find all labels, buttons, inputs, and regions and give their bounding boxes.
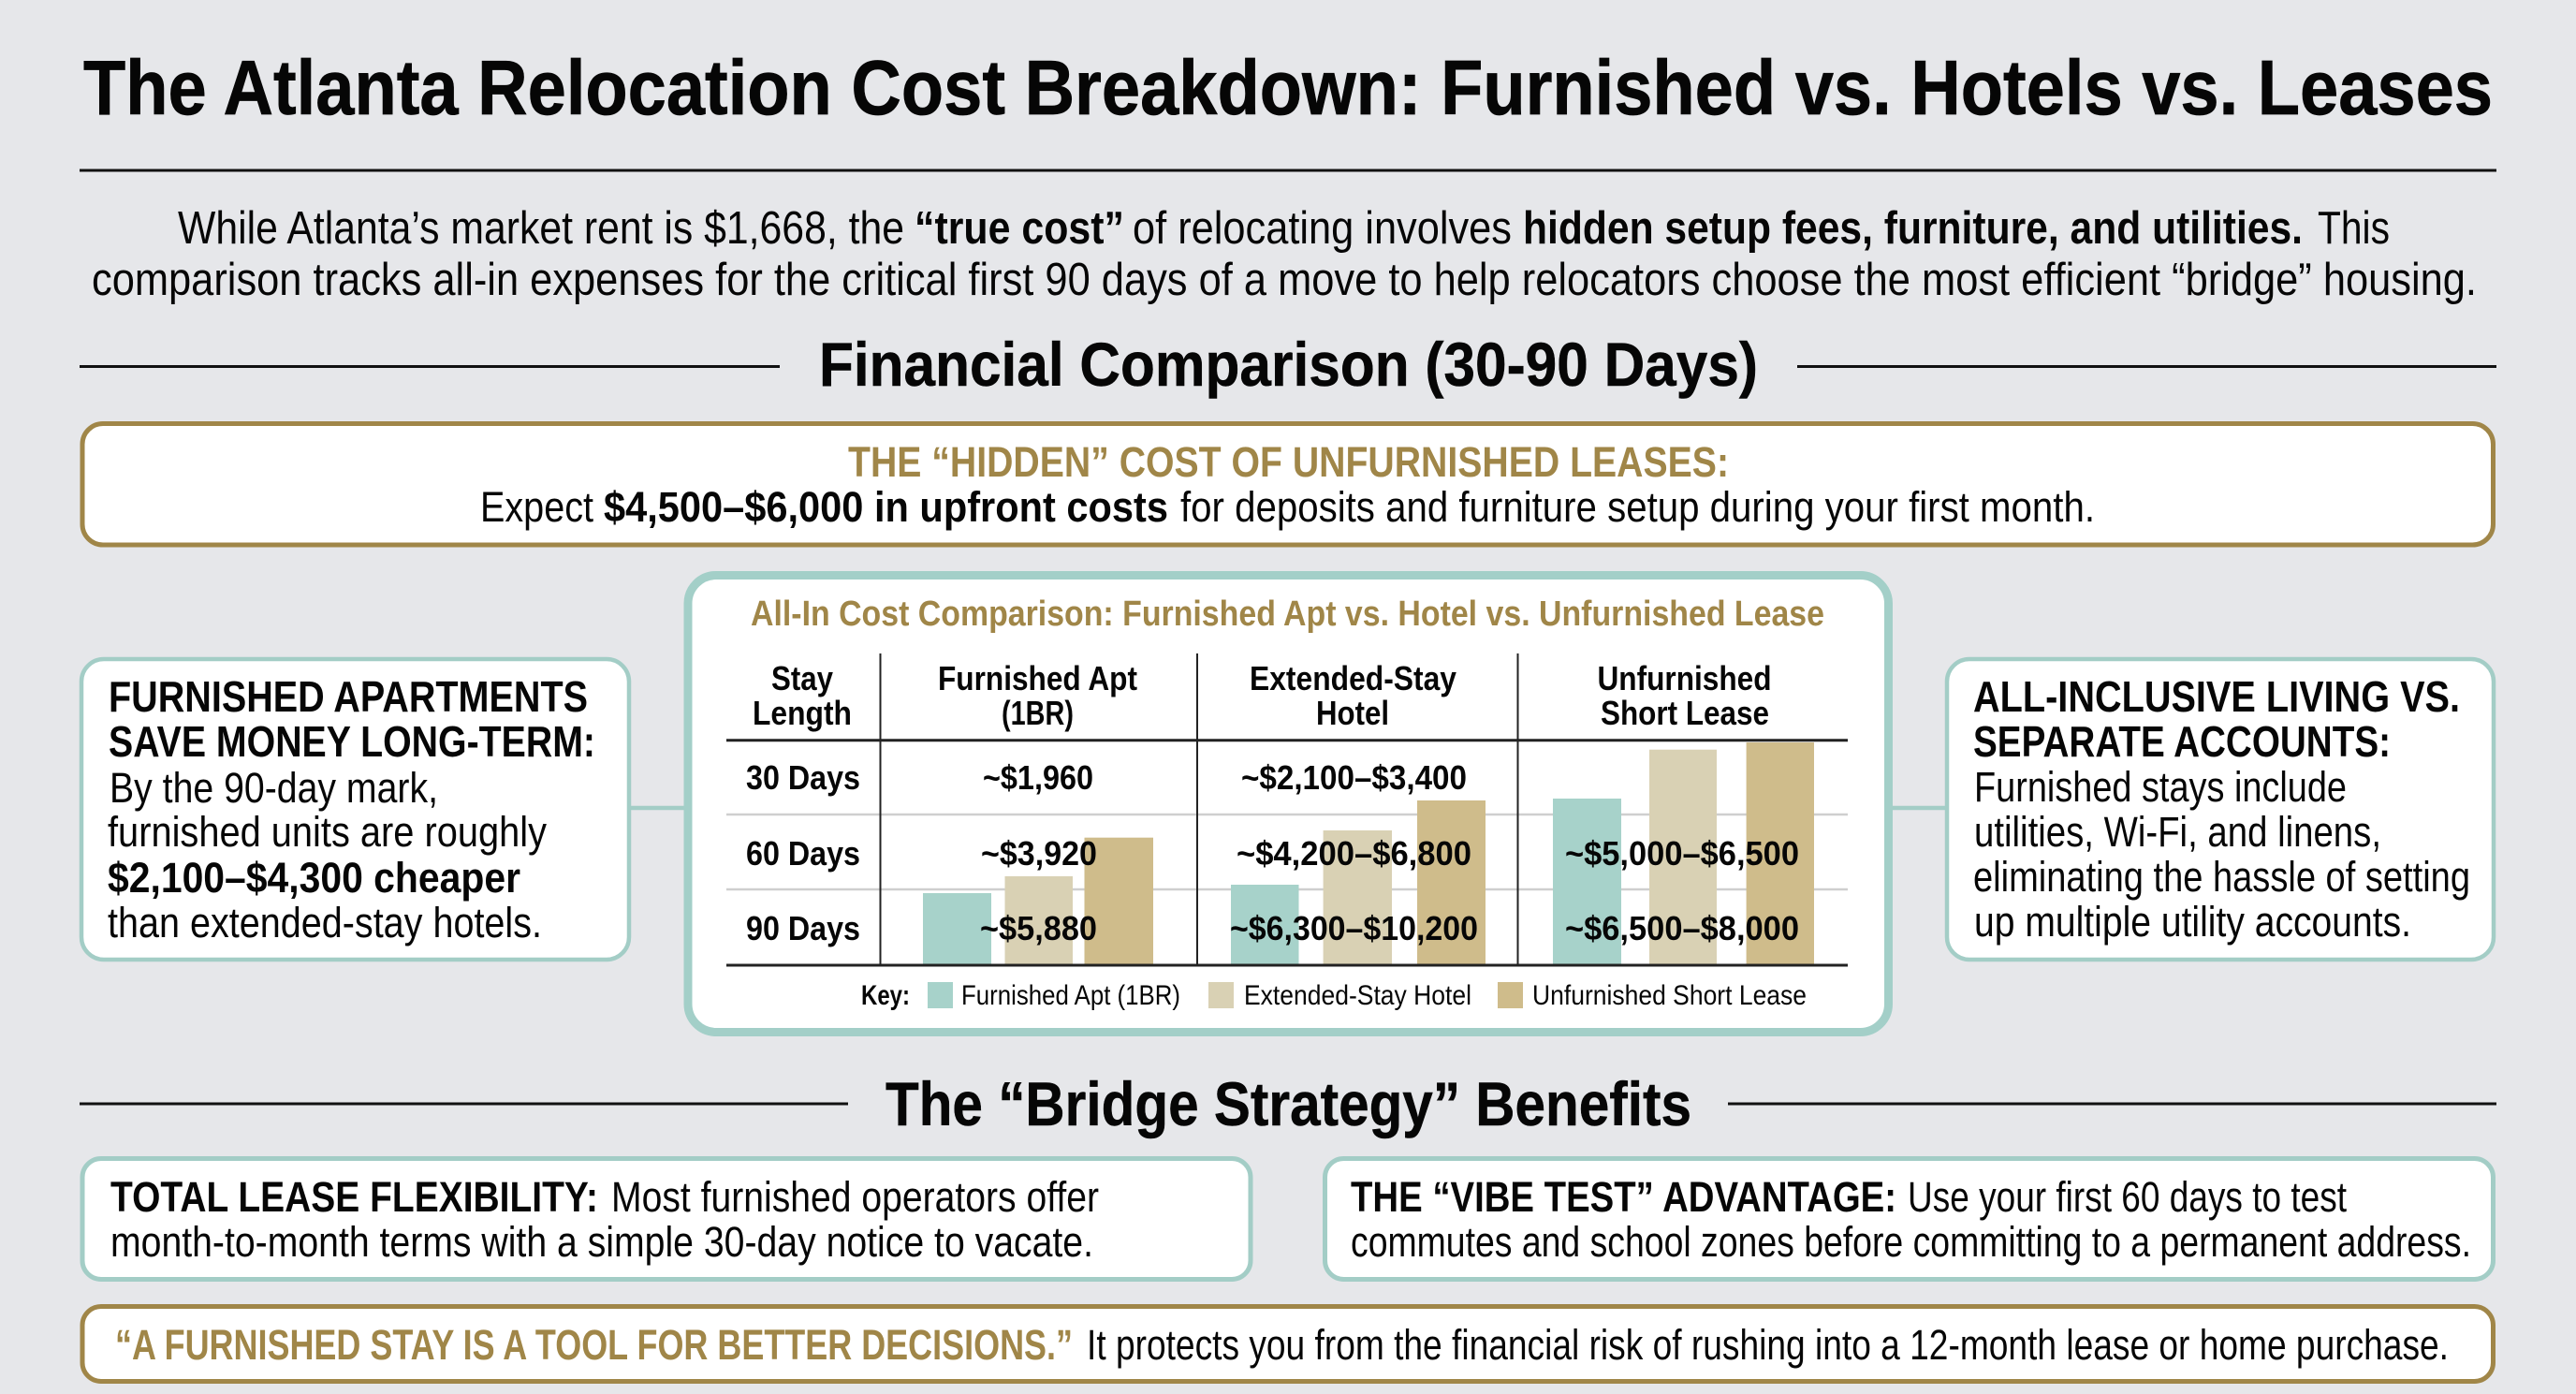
panel: all-inclusive living vs separate accounts: [1947, 659, 2494, 960]
panel: furnished apartments save money: FURNISHED APARTMENTS: [109, 672, 588, 721]
row: 60 days: ~$5,000–$6,500: [1565, 834, 1799, 873]
table header: Extended-Stay: [1250, 659, 1456, 697]
bars: extended-stay hotel column: [1231, 800, 1486, 964]
table header: Hotel: [1316, 694, 1389, 732]
callout: hidden cost of unfurnished leases: Expect: [480, 483, 593, 531]
bars: furnished apt column: [923, 838, 1153, 964]
panel: furnished apartments save money: SAVE MONEY LONG-TERM:: [109, 717, 595, 766]
row: 30 days: 30 Days: [746, 758, 860, 797]
intro text block: “true cost”: [915, 203, 1124, 254]
panel: all-inclusive living vs separate accounts: eliminating the hassle of setting: [1973, 853, 2470, 901]
intro text block: This: [2318, 203, 2390, 254]
row: 30 days: ~$2,100–$3,400: [1241, 758, 1467, 797]
callout: furnished stay quote: [82, 1307, 2494, 1382]
row: 90 days: [746, 909, 1799, 947]
chart title: All-In Cost Comparison: Furnished Apt vs. Hotel vs. Unfurnished Lease: [751, 594, 1824, 634]
table header: (1BR): [1002, 694, 1074, 732]
row: 60 days: ~$3,920: [981, 834, 1097, 873]
row: 60 days: ~$4,200–$6,800: [1237, 834, 1471, 873]
callout: hidden cost of unfurnished leases: for deposits and furniture setup during your first month.: [1180, 483, 2095, 531]
panel: all-inclusive living vs separate accounts: SEPARATE ACCOUNTS:: [1973, 717, 2391, 766]
panel: total lease flexibility: TOTAL LEASE FLEXIBILITY:: [110, 1173, 598, 1221]
panel: total lease flexibility: Most furnished operators offer: [611, 1173, 1099, 1221]
row: 90 days: ~$6,300–$10,200: [1230, 909, 1478, 947]
section heading: financial comparison: Financial Comparison (30-90 Days): [819, 330, 1758, 399]
panel: vibe test advantage: [1325, 1159, 2494, 1279]
legend: Key:: [861, 980, 910, 1011]
intro text block: of relocating involves: [1133, 203, 1512, 254]
callout: hidden cost of unfurnished leases: $4,500–$6,000 in upfront costs: [604, 483, 1168, 531]
intro text block: hidden setup fees, furniture, and utilities.: [1523, 203, 2303, 254]
bars: unfurnished short lease column: [1553, 742, 1814, 964]
row: 90 days: ~$6,500–$8,000: [1565, 909, 1799, 947]
panel: furnished apartments save money: $2,100–$4,300 cheaper: [108, 854, 520, 902]
row: 90 days: ~$5,880: [980, 909, 1097, 947]
panel: all-inclusive living vs separate accounts: up multiple utility accounts.: [1974, 898, 2411, 946]
panel: furnished apartments save money: than extended-stay hotels.: [108, 899, 542, 946]
panel: vibe test advantage: Use your first 60 days to test: [1908, 1173, 2347, 1221]
panel: total lease flexibility: month-to-month terms with a simple 30-day notice to vacate.: [110, 1218, 1093, 1266]
panel: total lease flexibility: [82, 1159, 1251, 1279]
callout: hidden cost of unfurnished leases: [82, 423, 2494, 545]
panel: vibe test advantage: THE “VIBE TEST” ADVANTAGE:: [1351, 1173, 1896, 1221]
intro text block: [92, 203, 2477, 305]
table header: Stay: [771, 659, 833, 697]
panel: all-inclusive living vs separate accounts: ALL-INCLUSIVE LIVING VS.: [1973, 672, 2460, 721]
table header: [753, 659, 1771, 732]
table header: Length: [753, 694, 852, 732]
row: 90 days: 90 Days: [746, 909, 860, 947]
panel: all-in cost comparison chart: [688, 575, 1889, 1032]
panel: all-inclusive living vs separate accounts: utilities, Wi-Fi, and linens,: [1974, 808, 2381, 856]
table header: Furnished Apt: [938, 659, 1137, 697]
connector: left panel to chart: [631, 806, 686, 810]
callout: hidden cost of unfurnished leases: THE “HIDDEN” COST OF UNFURNISHED LEASES:: [848, 438, 1729, 486]
row: 60 days: [746, 834, 1799, 873]
section heading: bridge strategy benefits: The “Bridge Strategy” Benefits: [886, 1069, 1691, 1138]
table header: Short Lease: [1601, 694, 1769, 732]
callout: furnished stay quote: “A FURNISHED STAY IS A TOOL FOR BETTER DECISIONS.”: [115, 1321, 1073, 1369]
panel: furnished apartments save money: [81, 659, 629, 960]
table header: Unfurnished: [1597, 659, 1771, 697]
panel: furnished apartments save money: furnished units are roughly: [108, 808, 547, 856]
legend: Extended-Stay Hotel: [1244, 980, 1471, 1011]
row: 30 days: ~$1,960: [983, 758, 1093, 797]
panel: all-inclusive living vs separate accounts: Furnished stays include: [1974, 763, 2347, 811]
row: 60 days: 60 Days: [746, 834, 860, 873]
legend: Furnished Apt (1BR): [961, 980, 1180, 1011]
connector: chart to right panel: [1891, 806, 1947, 810]
intro text block: While Atlanta’s market rent is $1,668, the: [178, 203, 904, 254]
panel: furnished apartments save money: By the 90-day mark,: [110, 764, 438, 812]
legend: [861, 980, 1807, 1011]
row: 30 days: [746, 758, 1467, 797]
legend: Unfurnished Short Lease: [1532, 980, 1807, 1011]
